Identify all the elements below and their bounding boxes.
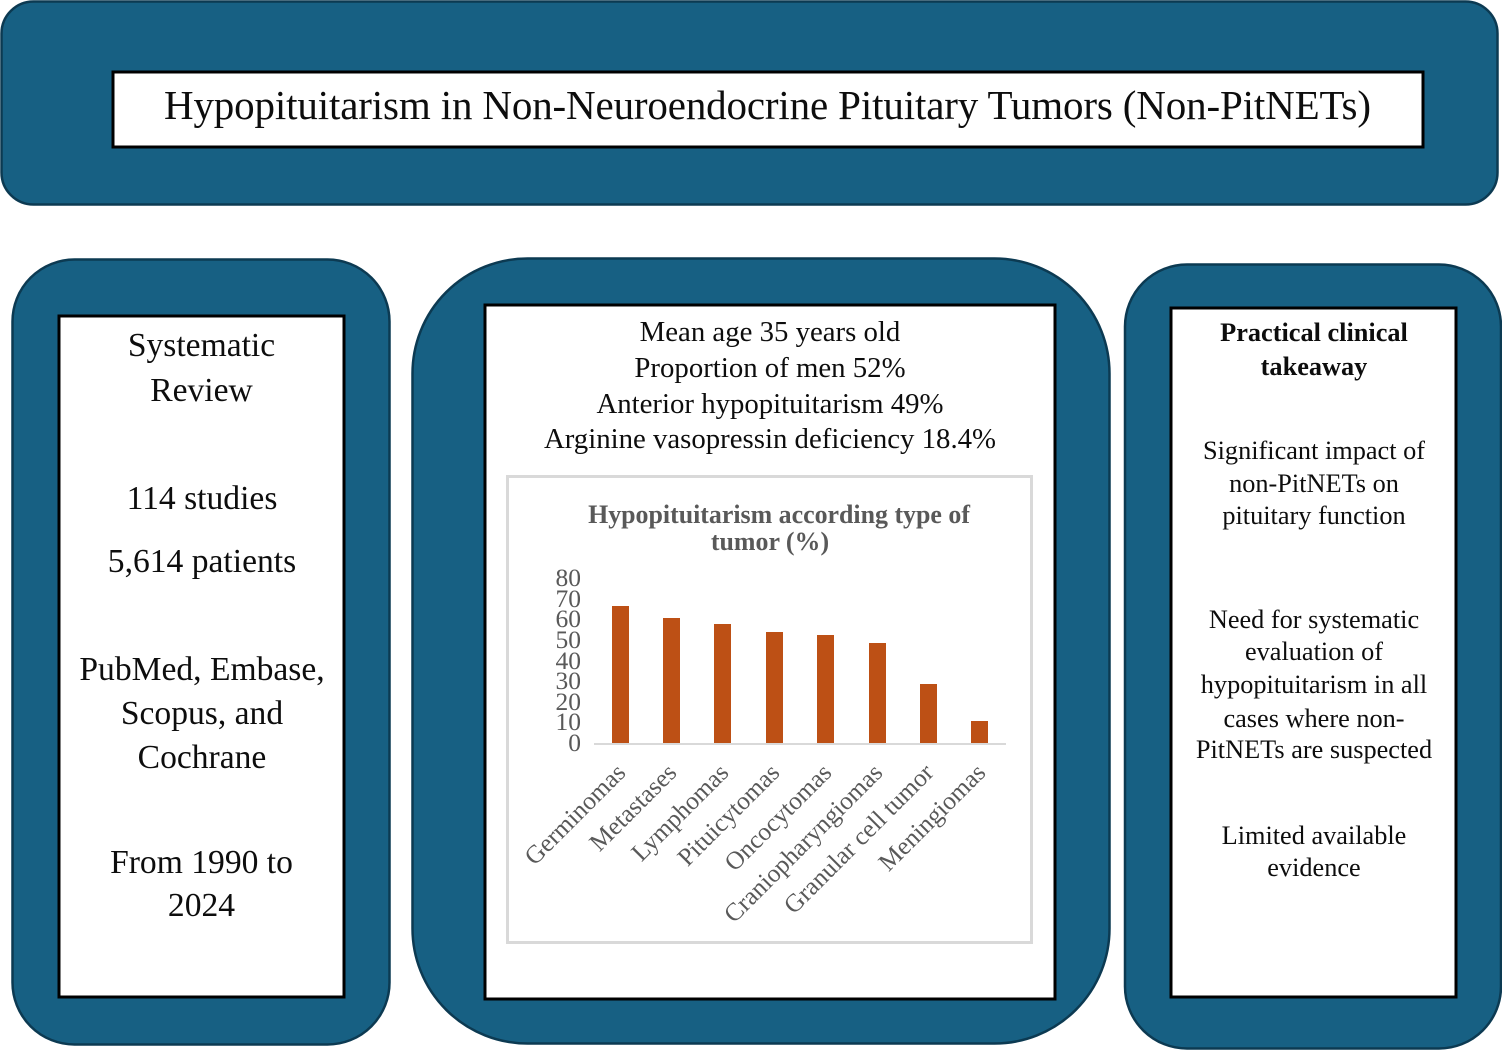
bar chart: hypopituitarism by tumor type [508,476,1032,942]
y axis labels: 10 [556,707,581,736]
panel: results [412,258,1110,1044]
x axis labels: Germinomas [519,758,631,871]
heading: takeaway: Practical clinical [1220,318,1408,347]
y axis labels: 30 [556,666,581,695]
y axis labels: 70 [556,584,581,613]
text: impact: pituitary function [1222,501,1406,530]
text: key statistics: Mean age 35 years old [640,316,901,348]
y axis labels: 20 [556,687,581,716]
text: date range: 2024 [168,887,235,924]
text: evaluation: cases where non- [1223,704,1405,733]
text: key statistics: Proportion of men 52% [634,352,906,384]
text: date range [110,844,293,924]
text: review heading [128,327,275,409]
text: evaluation: PitNETs are suspected [1196,735,1432,764]
heading: takeaway [1220,318,1408,381]
text: databases: Cochrane [138,739,266,776]
text: evaluation: hypopituitarism in all [1201,670,1427,699]
text: evidence [1222,821,1406,882]
text: databases [79,651,325,776]
text: evidence: evidence [1267,853,1361,882]
x axis labels: Granular cell tumor [778,758,940,919]
y axis labels: 40 [556,646,581,675]
text: evidence: Limited available [1222,821,1406,850]
text: evaluation: evaluation of [1245,637,1383,666]
panel: practical clinical takeaway [1125,264,1501,1048]
text: key statistics: Arginine vasopressin deficiency 18.4% [544,423,996,455]
bars [612,606,988,743]
y axis labels: 60 [556,604,581,633]
text: evaluation: Need for systematic [1209,605,1419,634]
x axis labels: Oncocytomas [719,758,837,877]
x axis labels: Metastases [584,758,682,857]
text: key statistics: Anterior hypopituitarism 49% [596,388,944,420]
text: databases: Scopus, and [121,695,283,732]
x axis labels: Craniopharyngiomas [718,758,888,928]
x axis labels: Pituicytomas [672,758,785,872]
text: impact: non-PitNETs on [1229,469,1399,498]
text: databases: PubMed, Embase, [79,651,325,688]
text: evaluation [1196,605,1432,764]
text: review heading: Review [150,372,254,409]
title: Hypopituitarism in Non-Neuroendocrine Pituitary Tumors (Non-PitNETs) [164,82,1371,128]
chart title: tumor (%) [711,527,829,556]
text: study counts: 114 studies [127,480,277,517]
text: review heading: Systematic [128,327,275,364]
x axis labels: Meningiomas [873,758,991,877]
panel: header [2,2,1498,204]
text: study counts [108,480,296,580]
y axis labels: 50 [556,625,581,654]
text: key statistics [544,316,996,455]
heading: takeaway: takeaway [1261,352,1367,381]
x axis labels: Lymphomas [626,758,734,867]
text: date range: From 1990 to [110,844,293,881]
panel: systematic review [12,260,390,1044]
y axis labels: 0 [568,728,581,757]
text: impact [1203,436,1425,530]
text: study counts: 5,614 patients [108,543,296,580]
y axis labels: 80 [556,563,581,592]
y axis labels [556,563,581,757]
x axis labels [519,758,991,928]
text: impact: Significant impact of [1203,436,1425,465]
chart title: Hypopituitarism according type of [588,500,970,529]
chart title [588,500,970,556]
